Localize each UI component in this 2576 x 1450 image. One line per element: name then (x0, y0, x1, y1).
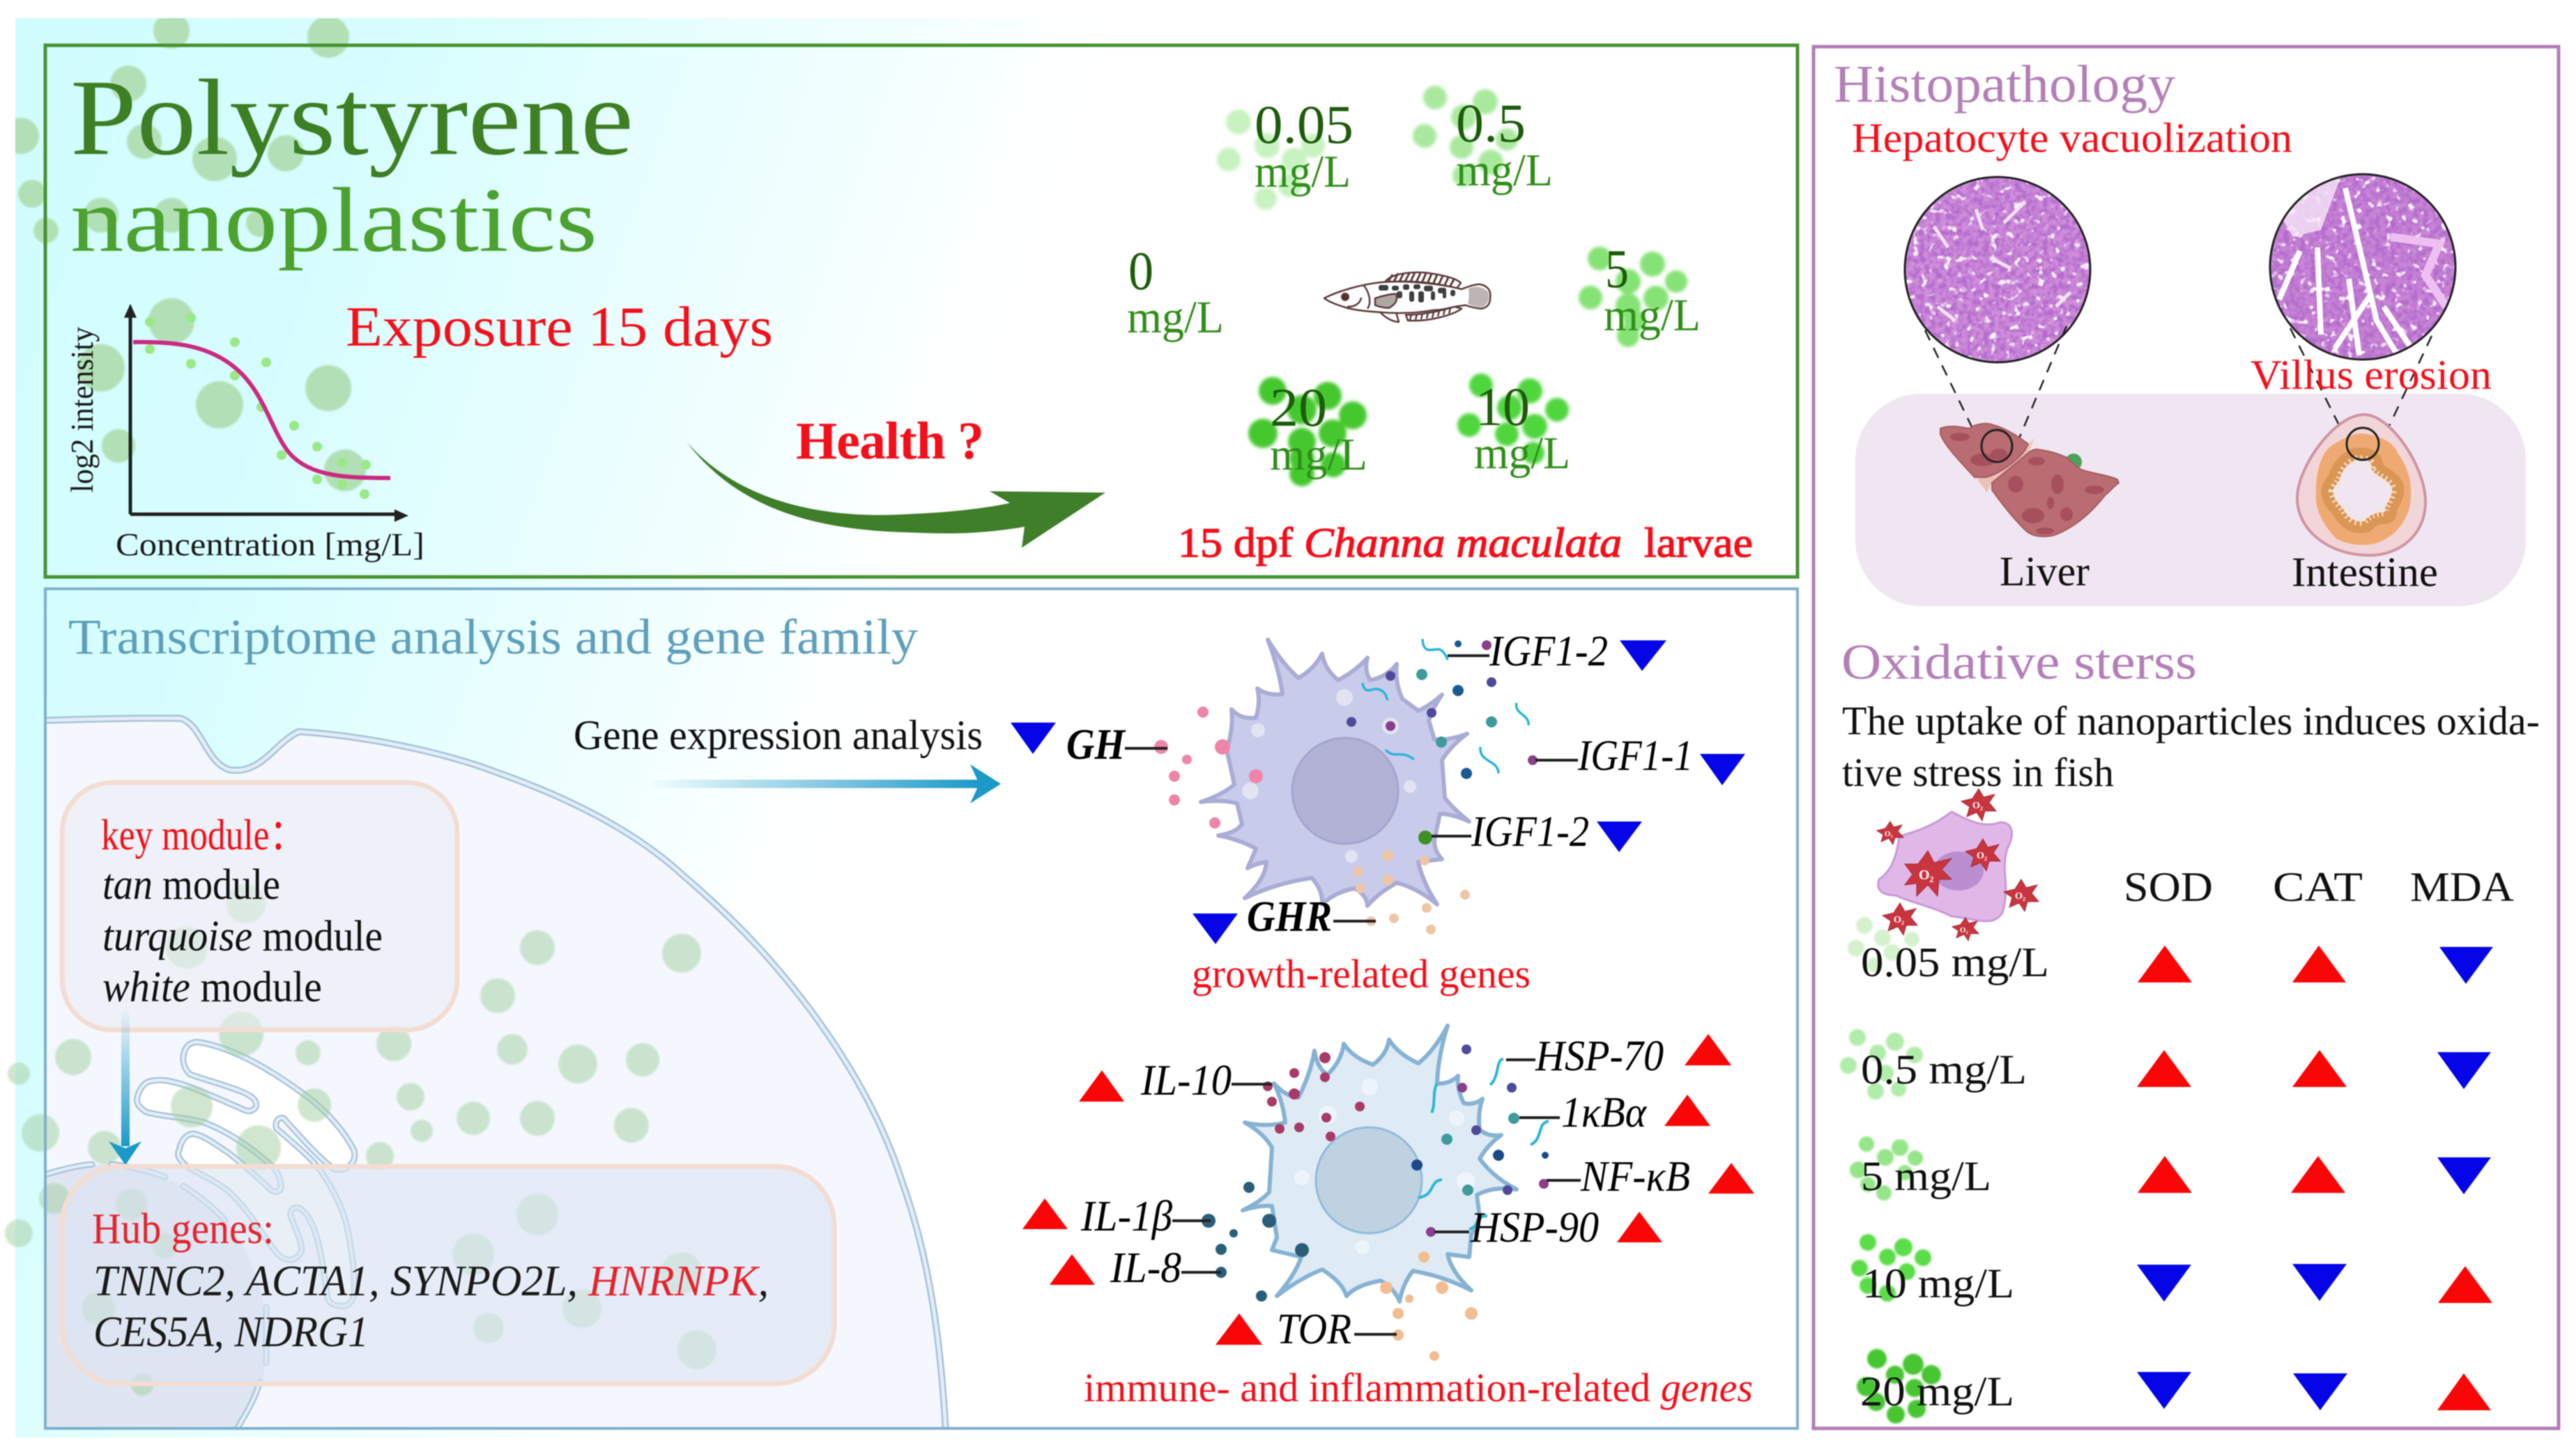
concentration labels: mg/L (1270, 429, 1367, 480)
label: liver: Liver (2000, 548, 2090, 594)
table markers: up and down triangles (2137, 946, 2493, 1410)
caption: immune genes: immune- and inflammation-related genes (1084, 1365, 1753, 1410)
gene label: IGF1-2 middle: IGF1-2 (1471, 808, 1589, 856)
label: hepatocyte vacuolization: Hepatocyte vacuolization (1852, 115, 2292, 161)
caption: growth-related genes: growth-related genes (1192, 951, 1531, 996)
row labels: 5 mg/L (1861, 1153, 1991, 1199)
box: key module: white module (102, 964, 322, 1011)
gene label: NF-kB: NF-κB (1580, 1153, 1690, 1201)
background particles in cell (5, 884, 716, 1396)
y axis label: log2 intensity (64, 327, 100, 493)
health question: Health ? (796, 412, 984, 470)
gene label: IL-1b: IL-1β (1080, 1193, 1172, 1240)
panel: polystyrene exposure (45, 45, 1797, 577)
organ background (1855, 394, 2526, 606)
icon: cell with ROS: O₂ (1894, 915, 1904, 925)
table headers: SOD (2124, 864, 2213, 910)
illustration: immune-related cell (1022, 1026, 1754, 1410)
heading: histopathology: Histopathology (1834, 55, 2175, 114)
heading: transcriptome: Transcriptome analysis and gene family (68, 609, 918, 665)
gene label: HSP-70: HSP-70 (1535, 1033, 1664, 1080)
row labels (1860, 939, 2049, 1414)
concentration labels: 20 (1270, 377, 1327, 438)
concentration labels: 0.05 (1255, 94, 1354, 155)
box: hub genes (62, 1166, 834, 1384)
icon: fish (1324, 272, 1490, 322)
box: hub genes: TNNC2, ACTA1, SYNPO2L, HNRNPK, (93, 1258, 769, 1305)
box: key module: tan module (102, 861, 280, 909)
micrograph: intestine (2270, 174, 2455, 360)
concentration labels (1127, 93, 1701, 480)
concentration labels: 10 (1475, 376, 1530, 437)
row labels: 10 mg/L (1862, 1260, 2014, 1306)
label: villus erosion: Villus erosion (2251, 352, 2492, 398)
table headers: MDA (2410, 864, 2514, 910)
box: key module (62, 782, 457, 1030)
gene label: TOR: TOR (1277, 1306, 1351, 1353)
concentration labels: mg/L (1255, 146, 1351, 197)
concentration labels: 0 (1128, 240, 1153, 301)
heading: oxidative stress: Oxidative sterss (1841, 634, 2197, 690)
title: nanoplastics: nanoplastics (70, 169, 597, 271)
particle clusters by concentration (1217, 86, 1687, 486)
gene label: IL-8: IL-8 (1110, 1244, 1181, 1292)
body text: tive stress in fish (1842, 750, 2114, 795)
body text (1842, 698, 2540, 795)
concentration labels: mg/L (1474, 428, 1570, 479)
box: key module: key module： (101, 812, 305, 859)
icon: cell with ROS: O₂ (1960, 926, 1969, 934)
row labels: 0.05 mg/L (1861, 939, 2049, 985)
chart: dose response curve (64, 304, 424, 563)
body text: The uptake of nanoparticles induces oxida- (1842, 698, 2540, 743)
arrow: key module to hub genes (109, 1008, 141, 1165)
icon: cell with ROS: O₂ (1972, 801, 1983, 811)
icon: cell with ROS: O₂ (1885, 830, 1894, 838)
panel: transcriptome analysis (5, 589, 1797, 1433)
organelle: nucleus (45, 1164, 266, 1429)
gene label: HSP-90: HSP-90 (1470, 1204, 1599, 1251)
box: hub genes: Hub genes: (92, 1205, 274, 1253)
concentration labels: 5 (1605, 238, 1629, 299)
caption: larvae: 15 dpf Channa maculata larvae (1178, 520, 1753, 566)
row labels: 0.5 mg/L (1861, 1047, 2027, 1093)
icon: cell with ROS (1877, 789, 2039, 941)
concentration labels: mg/L (1456, 145, 1553, 196)
concentration labels: mg/L (1127, 292, 1224, 343)
icon: cell with ROS: O₂ (2015, 891, 2025, 902)
concentration labels: mg/L (1604, 290, 1701, 341)
gene label: GHR: GHR (1247, 893, 1332, 941)
arrow: curved green (687, 442, 1105, 548)
background nanoplastic particles, upper panel (3, 13, 366, 491)
gene label: IkBa: 1κBα (1561, 1089, 1647, 1136)
icon: cell with ROS: O₂ (1977, 851, 1987, 861)
gene label: IGF1-1: IGF1-1 (1577, 732, 1693, 780)
arrow: gene expression (647, 764, 1001, 803)
icon: cell with ROS: O₂ (1919, 867, 1934, 883)
gene label: IL-10: IL-10 (1140, 1057, 1232, 1104)
table headers: CAT (2273, 864, 2363, 910)
exposure label: Exposure 15 days (346, 295, 773, 358)
illustration: growth-related cell (1066, 628, 1745, 996)
gene label: GH: GH (1066, 721, 1126, 769)
dashed callout lines (1925, 326, 2432, 440)
micrograph: liver (1905, 177, 2090, 362)
title: Polystyrene: Polystyrene (70, 57, 634, 178)
table headers (2124, 864, 2514, 910)
concentration labels: 0.5 (1456, 93, 1526, 153)
organelle: endoplasmic reticulum (137, 1042, 355, 1306)
x axis label: Concentration [mg/L] (116, 527, 424, 563)
panel: histopathology and oxidative stress (1814, 47, 2559, 1428)
box: hub genes: CES5A, NDRG1 (93, 1309, 369, 1356)
icon: liver (1940, 424, 2119, 537)
label: intestine: Intestine (2292, 549, 2438, 595)
cell background illustration (42, 718, 946, 1433)
icon: intestine (2297, 415, 2425, 555)
marker: gene expression down (1011, 723, 1056, 754)
box: key module: turquoise module (102, 913, 383, 960)
row particle clusters (1840, 917, 1941, 1424)
gene expression label: Gene expression analysis (574, 712, 983, 758)
row labels: 20 mg/L (1860, 1368, 2014, 1414)
gene label: IGF1-2 top: IGF1-2 (1489, 628, 1608, 675)
